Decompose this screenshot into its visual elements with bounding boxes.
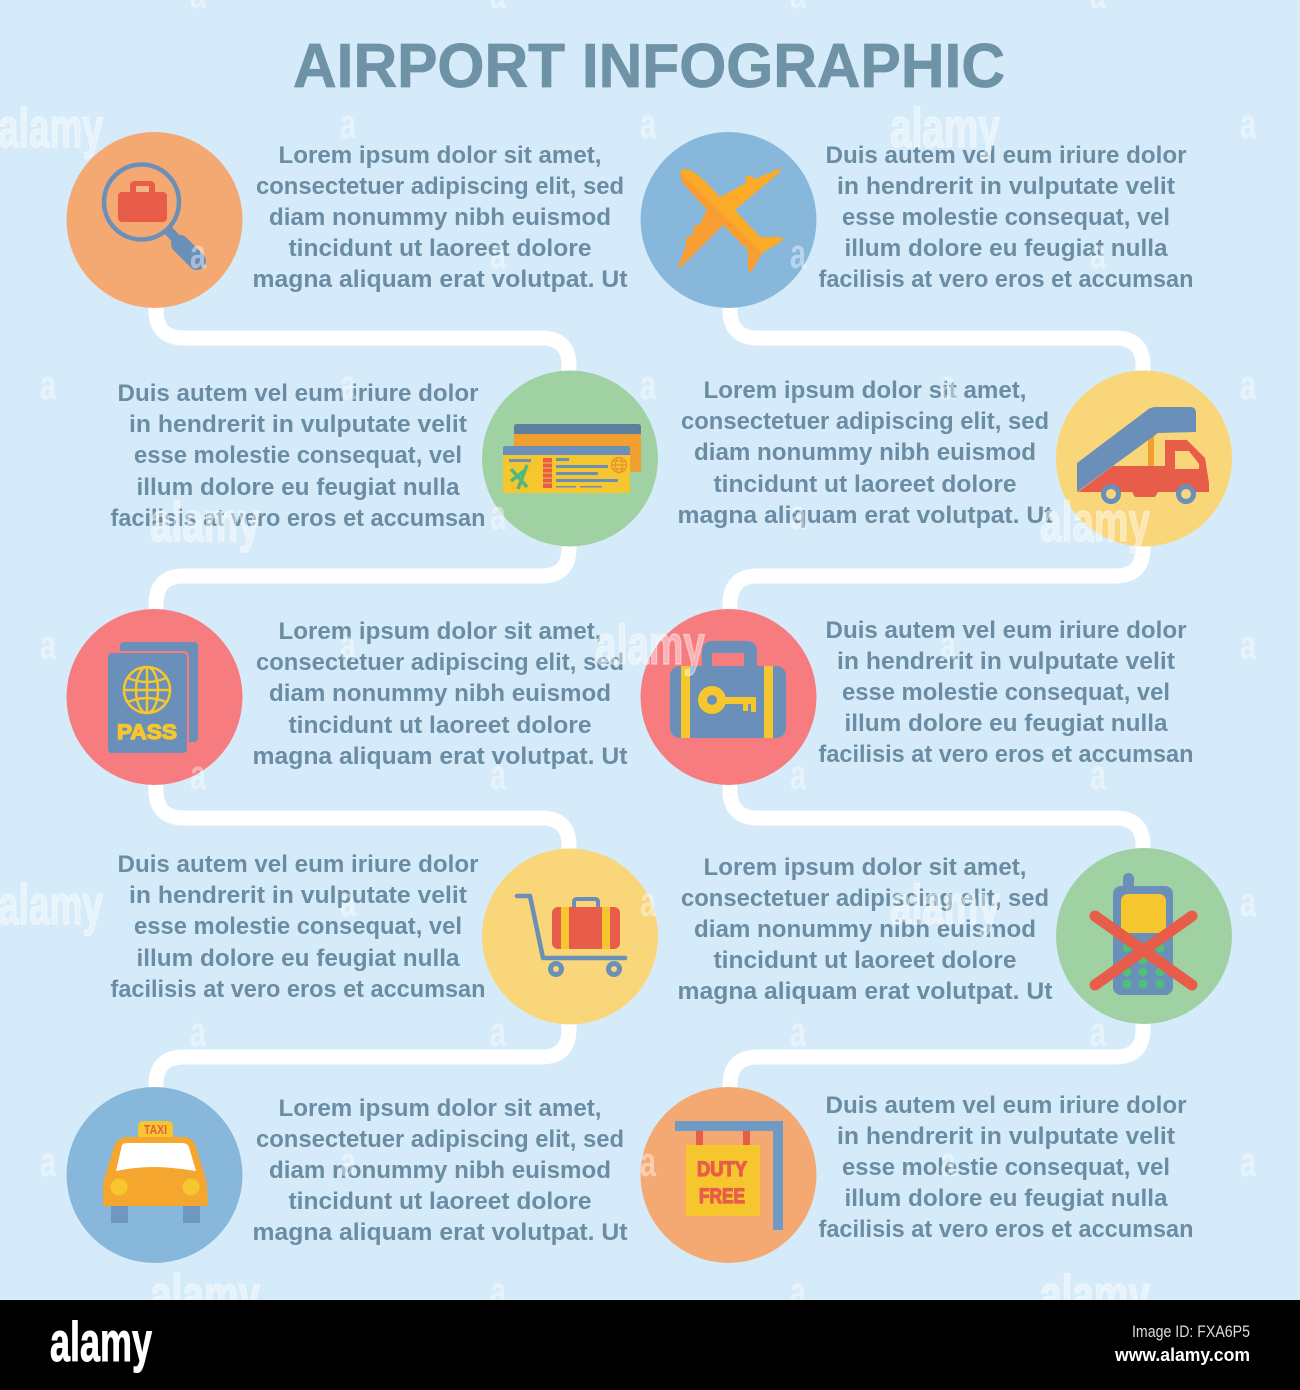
stock watermark overlay: a xyxy=(1240,621,1256,668)
text block: facilisis at vero eros et accumsan xyxy=(818,1216,1194,1243)
stock watermark overlay: a xyxy=(1090,1008,1106,1055)
text block: Lorem ipsum dolor sit amet, xyxy=(704,377,1026,404)
stock watermark overlay: a xyxy=(340,100,356,147)
stock watermark overlay: a xyxy=(940,361,956,408)
text block: Lorem ipsum dolor sit amet, xyxy=(704,854,1026,881)
text block: esse molestie consequat, vel xyxy=(842,204,1170,231)
stock watermark overlay: a xyxy=(190,230,206,277)
text block: in hendrerit in vulputate velit xyxy=(129,882,467,909)
text block: Duis autem vel eum iriure dolor xyxy=(826,1092,1186,1119)
text block: diam nonummy nibh euismod xyxy=(694,916,1036,943)
text block xyxy=(110,851,486,1003)
stock watermark overlay: a xyxy=(1240,1138,1256,1185)
text block: facilisis at vero eros et accumsan xyxy=(818,741,1194,768)
icon: stair truck xyxy=(1077,407,1209,502)
text block: esse molestie consequat, vel xyxy=(134,442,462,469)
text block: esse molestie consequat, vel xyxy=(842,1154,1170,1181)
stock watermark overlay: alamy xyxy=(890,873,1000,936)
stock watermark overlay: a xyxy=(940,621,956,668)
stock watermark overlay: a xyxy=(490,1268,506,1315)
text block: illum dolore eu feugiat nulla xyxy=(844,235,1168,262)
stock watermark overlay: a xyxy=(340,1138,356,1185)
text block: magna aliquam erat volutpat. Ut xyxy=(252,1219,628,1246)
stock watermark overlay: a xyxy=(640,878,656,925)
text block: diam nonummy nibh euismod xyxy=(269,680,611,707)
stock watermark overlay: a xyxy=(1090,230,1106,277)
text block: consectetuer adipiscing elit, sed xyxy=(681,885,1049,912)
text block: in hendrerit in vulputate velit xyxy=(129,411,467,438)
text block: esse molestie consequat, vel xyxy=(134,913,462,940)
icon: duty free sign: DUTY xyxy=(697,1158,747,1181)
text block: Lorem ipsum dolor sit amet, xyxy=(278,618,602,645)
stock watermark overlay: a xyxy=(940,1138,956,1185)
panel: no phones xyxy=(678,848,1232,1024)
stock watermark overlay: a xyxy=(790,751,806,798)
text block xyxy=(678,377,1052,529)
stock watermark overlay: a xyxy=(790,1008,806,1055)
panel: passport xyxy=(66,609,628,785)
stock watermark overlay: alamy xyxy=(1040,1263,1150,1326)
stock watermark overlay: alamy xyxy=(0,873,103,936)
stock watermark overlay: a xyxy=(40,621,56,668)
text block: tincidunt ut laoreet dolore xyxy=(288,235,592,262)
stock watermark overlay: a xyxy=(490,1008,506,1055)
text block: facilisis at vero eros et accumsan xyxy=(818,266,1194,293)
text block: illum dolore eu feugiat nulla xyxy=(136,945,460,972)
stock watermark overlay: a xyxy=(190,1008,206,1055)
stock watermark overlay: a xyxy=(790,230,806,277)
stock watermark overlay: a xyxy=(340,878,356,925)
panel: airplane xyxy=(640,132,1194,308)
stock watermark overlay: a xyxy=(1240,361,1256,408)
stock watermark overlay: a xyxy=(640,361,656,408)
stock watermark overlay: a xyxy=(790,1268,806,1315)
stock watermark overlay: a xyxy=(490,230,506,277)
icon: passport: PASS xyxy=(117,721,177,744)
text block: facilisis at vero eros et accumsan xyxy=(110,505,486,532)
text block xyxy=(252,142,628,293)
stock watermark overlay: a xyxy=(640,100,656,147)
text block: illum dolore eu feugiat nulla xyxy=(136,474,460,501)
text block: illum dolore eu feugiat nulla xyxy=(844,710,1168,737)
text block: consectetuer adipiscing elit, sed xyxy=(256,173,624,200)
stock watermark overlay: a xyxy=(1240,878,1256,925)
icon: duty free sign: FREE xyxy=(699,1185,745,1208)
icon: baggage cart xyxy=(517,896,625,974)
panel: duty free xyxy=(640,1087,1194,1263)
text block: Duis autem vel eum iriure dolor xyxy=(826,142,1186,169)
icon: passport xyxy=(106,642,198,755)
stock watermark overlay: a xyxy=(490,491,506,538)
text block: tincidunt ut laoreet dolore xyxy=(288,712,592,739)
text block xyxy=(678,854,1052,1005)
text block: tincidunt ut laoreet dolore xyxy=(714,947,1016,974)
panel: luggage cart xyxy=(110,848,658,1024)
text block: illum dolore eu feugiat nulla xyxy=(844,1185,1168,1212)
stock watermark overlay: a xyxy=(790,491,806,538)
text block xyxy=(110,380,486,532)
stock watermark overlay: a xyxy=(1090,751,1106,798)
text block: diam nonummy nibh euismod xyxy=(269,1157,611,1184)
footer bar xyxy=(0,1300,1300,1390)
icon: magnifier over bag xyxy=(104,164,197,261)
text block: consectetuer adipiscing elit, sed xyxy=(256,1126,624,1153)
text block: magna aliquam erat volutpat. Ut xyxy=(252,743,628,770)
stock watermark overlay: a xyxy=(640,1138,656,1185)
text block: in hendrerit in vulputate velit xyxy=(837,1123,1175,1150)
text block: facilisis at vero eros et accumsan xyxy=(110,976,486,1003)
stock watermark overlay: a xyxy=(1240,100,1256,147)
panel: baggage search xyxy=(66,132,628,308)
icon: boarding tickets xyxy=(503,424,641,493)
panel: taxi xyxy=(66,1087,628,1263)
stock watermark overlay: alamy xyxy=(0,96,103,159)
panel: boarding passes xyxy=(110,370,658,546)
connector path: right route xyxy=(730,300,1143,1100)
text block xyxy=(818,617,1194,768)
icon: taxi xyxy=(103,1121,208,1223)
text block xyxy=(252,1095,628,1246)
stock watermark overlay: alamy xyxy=(890,96,1000,159)
stock watermark overlay: a xyxy=(340,621,356,668)
text block: magna aliquam erat volutpat. Ut xyxy=(678,978,1052,1005)
stock watermark overlay: a xyxy=(40,1138,56,1185)
stock watermark overlay: alamy xyxy=(1040,490,1150,553)
text block: Lorem ipsum dolor sit amet, xyxy=(278,142,602,169)
text block: magna aliquam erat volutpat. Ut xyxy=(678,502,1052,529)
text block: esse molestie consequat, vel xyxy=(842,679,1170,706)
footer url: www.alamy.com xyxy=(1114,1345,1250,1365)
text block xyxy=(818,1092,1194,1243)
stock watermark overlay: a xyxy=(190,751,206,798)
stock watermark overlay: a xyxy=(40,361,56,408)
icon: airplane xyxy=(678,169,783,272)
text block: Duis autem vel eum iriure dolor xyxy=(118,851,478,878)
stock watermark overlay: alamy xyxy=(150,490,260,553)
stock watermark overlay: alamy xyxy=(150,1263,260,1326)
text block: diam nonummy nibh euismod xyxy=(269,204,611,231)
panel: airstairs truck xyxy=(678,370,1232,546)
text block: Lorem ipsum dolor sit amet, xyxy=(278,1095,602,1122)
text block: consectetuer adipiscing elit, sed xyxy=(256,649,624,676)
text block: in hendrerit in vulputate velit xyxy=(837,648,1175,675)
footer logo: alamy xyxy=(50,1310,152,1373)
text block xyxy=(818,142,1194,293)
text block: in hendrerit in vulputate velit xyxy=(837,173,1175,200)
text block: consectetuer adipiscing elit, sed xyxy=(681,408,1049,435)
connector path: left route xyxy=(156,300,569,1100)
footer image id: Image ID: FXA6P5 xyxy=(1132,1322,1250,1341)
title: AIRPORT INFOGRAPHIC xyxy=(293,32,1005,101)
text block: tincidunt ut laoreet dolore xyxy=(288,1188,592,1215)
icon: taxi: TAXI xyxy=(144,1122,167,1137)
icon: suitcase with key xyxy=(670,641,786,738)
text block: tincidunt ut laoreet dolore xyxy=(714,471,1016,498)
text block: Duis autem vel eum iriure dolor xyxy=(118,380,478,407)
text block xyxy=(252,618,628,770)
icon: duty free sign xyxy=(675,1121,783,1230)
panel: locked luggage xyxy=(640,609,1194,785)
stock watermark overlay: a xyxy=(490,751,506,798)
stock watermark overlay: a xyxy=(340,361,356,408)
icon: crossed mobile phone xyxy=(1095,873,1192,995)
stock watermark overlay: alamy xyxy=(595,613,705,676)
text block: Duis autem vel eum iriure dolor xyxy=(826,617,1186,644)
text block: diam nonummy nibh euismod xyxy=(694,439,1036,466)
text block: magna aliquam erat volutpat. Ut xyxy=(252,266,628,293)
